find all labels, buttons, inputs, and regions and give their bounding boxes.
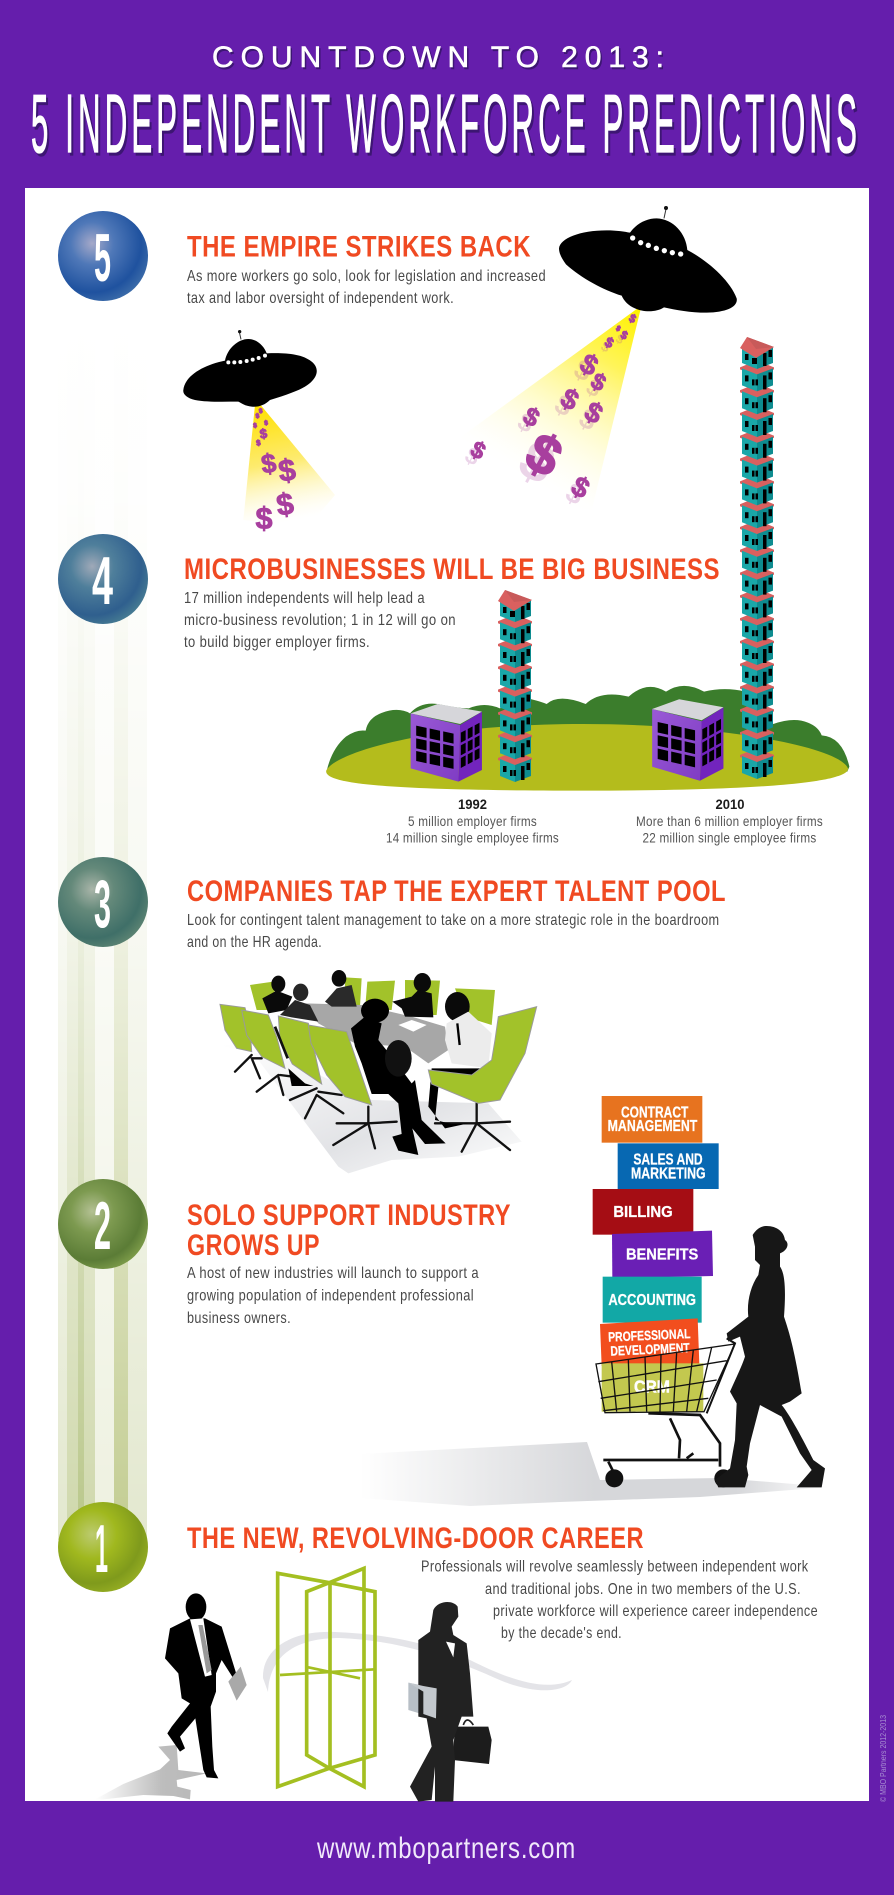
badge: 4: 4 [92, 543, 113, 619]
large UFO with beam of dollars: $ [513, 407, 538, 439]
block: professional development: DEVELOPMENT [610, 1340, 690, 1359]
2010 tower [740, 337, 774, 779]
small UFO with beam of dollars: $ [276, 453, 298, 489]
landscape with bushes and ground [326, 686, 849, 791]
2010 caption [636, 796, 823, 846]
badge: 5 [58, 211, 148, 301]
2010 caption: 2010 [716, 796, 745, 812]
large UFO with beam of dollars: $ [550, 388, 578, 423]
prediction 2 heading [187, 1199, 511, 1262]
revolving door frame [278, 1568, 375, 1787]
large UFO with beam of dollars: $ [569, 353, 598, 388]
block: CRM: CRM [634, 1376, 670, 1396]
large UFO with beam of dollars: $ [602, 333, 617, 351]
badge: 3: 3 [94, 866, 111, 942]
large UFO with beam of dollars: $ [466, 436, 490, 465]
large UFO with beam of dollars: $ [575, 347, 604, 382]
prediction 2 text: growing population of independent professional [187, 1288, 474, 1304]
block: contract management: MANAGEMENT [608, 1118, 698, 1135]
prediction 4 text: 17 million independents will help lead a [184, 590, 425, 607]
prediction 2 text: A host of new industries will launch to support a [187, 1265, 479, 1282]
badge: 5: 5 [94, 220, 111, 296]
large UFO with beam of dollars: $ [509, 427, 565, 496]
large UFO with beam of dollars: $ [627, 312, 638, 326]
1992 caption: 5 million employer firms [408, 813, 537, 829]
block: professional development [600, 1318, 699, 1366]
timeline stripes [58, 320, 147, 1540]
block: sales and marketing: SALES AND [633, 1151, 703, 1168]
large UFO with beam of dollars: $ [618, 329, 630, 343]
prediction 5 text [187, 268, 546, 307]
1992 low-rise building [411, 704, 482, 782]
small UFO with beam of dollars: $ [259, 426, 269, 442]
prediction 4 text: to build bigger employer firms. [184, 634, 370, 651]
prediction 5 text: As more workers go solo, look for legislation and increased [187, 268, 546, 285]
block: sales and marketing: MARKETING [631, 1165, 706, 1182]
2010 caption: 22 million single employee firms [642, 830, 816, 846]
small UFO with beam of dollars: $ [255, 501, 273, 535]
large UFO with beam of dollars: $ [556, 382, 584, 417]
large UFO with beam of dollars: $ [574, 402, 603, 437]
block: sales and marketing [618, 1143, 719, 1189]
block: accounting: ACCOUNTING [608, 1292, 696, 1309]
prediction 1 text: private workforce will experience career independence [493, 1603, 818, 1620]
badge: 1: 1 [95, 1511, 108, 1587]
website: www.mbopartners.com [316, 1832, 576, 1865]
man walking with folder and shadow [95, 1593, 247, 1799]
prediction 2 text: business owners. [187, 1310, 291, 1327]
prediction 1 heading: THE NEW, REVOLVING-DOOR CAREER [187, 1522, 644, 1555]
block: professional development: PROFESSIONAL [608, 1326, 691, 1345]
swoosh behind door [263, 1632, 572, 1692]
prediction 1 text [421, 1558, 818, 1642]
block: contract management [602, 1096, 702, 1143]
1992 caption: 1992 [458, 796, 487, 812]
large UFO with beam of dollars: $ [561, 476, 589, 511]
prediction 2 heading: SOLO SUPPORT INDUSTRY [187, 1199, 511, 1232]
prediction 5 text: tax and labor oversight of independent work. [187, 290, 454, 307]
large UFO with beam of dollars: $ [580, 395, 608, 430]
block: billing: BILLING [613, 1204, 673, 1221]
large UFO with beam of dollars: $ [566, 470, 595, 505]
prediction 5 heading: THE EMPIRE STRIKES BACK [187, 230, 531, 264]
prediction 2 heading: GROWS UP [187, 1229, 320, 1262]
prediction 1 text: and traditional jobs. One in two members of the U.S. [485, 1581, 801, 1598]
block: contract management: CONTRACT [621, 1105, 689, 1122]
badge: 3 [58, 857, 148, 947]
1992 caption [386, 796, 559, 846]
block: CRM [602, 1363, 703, 1412]
boardroom meeting illustration [218, 970, 537, 1173]
small UFO with beam of dollars: $ [258, 408, 263, 415]
prediction 4 heading: MICROBUSINESSES WILL BE BIG BUSINESS [184, 553, 720, 586]
large UFO with beam of dollars [457, 206, 737, 511]
small UFO with beam of dollars: $ [253, 422, 258, 430]
large UFO with beam of dollars: $ [518, 402, 544, 433]
title: COUNTDOWN TO 2013: [212, 41, 664, 74]
prediction 4 text [184, 590, 456, 651]
floor shadow under cart [360, 1442, 830, 1506]
prediction 2 text [187, 1265, 479, 1327]
2010 caption: More than 6 million employer firms [636, 813, 823, 829]
small UFO with beam of dollars: $ [274, 487, 296, 523]
stack of service blocks in shopping cart with shopper [593, 1096, 825, 1487]
1992 caption: 14 million single employee firms [386, 830, 559, 846]
prediction 3 text: and on the HR agenda. [187, 934, 322, 951]
large UFO with beam of dollars: $ [516, 420, 572, 489]
block: benefits [612, 1231, 713, 1278]
small UFO with beam of dollars: $ [259, 448, 278, 480]
1992 tower [498, 590, 532, 782]
woman with briefcase [408, 1602, 492, 1802]
small UFO with beam of dollars: $ [255, 413, 260, 420]
small UFO with beam of dollars: $ [264, 420, 269, 427]
title [31, 41, 863, 173]
large UFO with beam of dollars: $ [582, 373, 606, 402]
badge: 2: 2 [94, 1188, 111, 1264]
small UFO with beam of dollars [183, 330, 335, 535]
woman silhouette [715, 1226, 825, 1487]
prediction 3 heading: COMPANIES TAP THE EXPERT TALENT POOL [187, 875, 726, 908]
prediction 4 text: micro-business revolution; 1 in 12 will go on [184, 612, 456, 629]
shopping cart [596, 1338, 735, 1472]
block: benefits: BENEFITS [626, 1246, 699, 1263]
badge: 4 [58, 534, 148, 624]
block: billing [593, 1189, 693, 1235]
large UFO with beam of dollars: $ [461, 442, 484, 471]
large UFO with beam of dollars: $ [614, 323, 622, 333]
badge: 2 [58, 1179, 148, 1269]
title: COUNTDOWN TO 2013: [214, 43, 666, 76]
block: accounting [603, 1277, 702, 1323]
large UFO with beam of dollars: $ [613, 332, 626, 347]
prediction 3 text [187, 912, 720, 951]
large UFO with beam of dollars: $ [587, 367, 610, 396]
small UFO with beam of dollars: $ [256, 438, 262, 448]
large UFO with beam of dollars: $ [599, 338, 613, 356]
prediction 3 text: Look for contingent talent management to take on a more strategic role in the boardroom [187, 912, 720, 929]
copyright: © MBO Partners 2012-2013 [879, 1715, 888, 1802]
2010 low-rise building [652, 699, 723, 781]
prediction 1 text: by the decade's end. [501, 1625, 622, 1642]
badge: 1 [58, 1502, 148, 1592]
